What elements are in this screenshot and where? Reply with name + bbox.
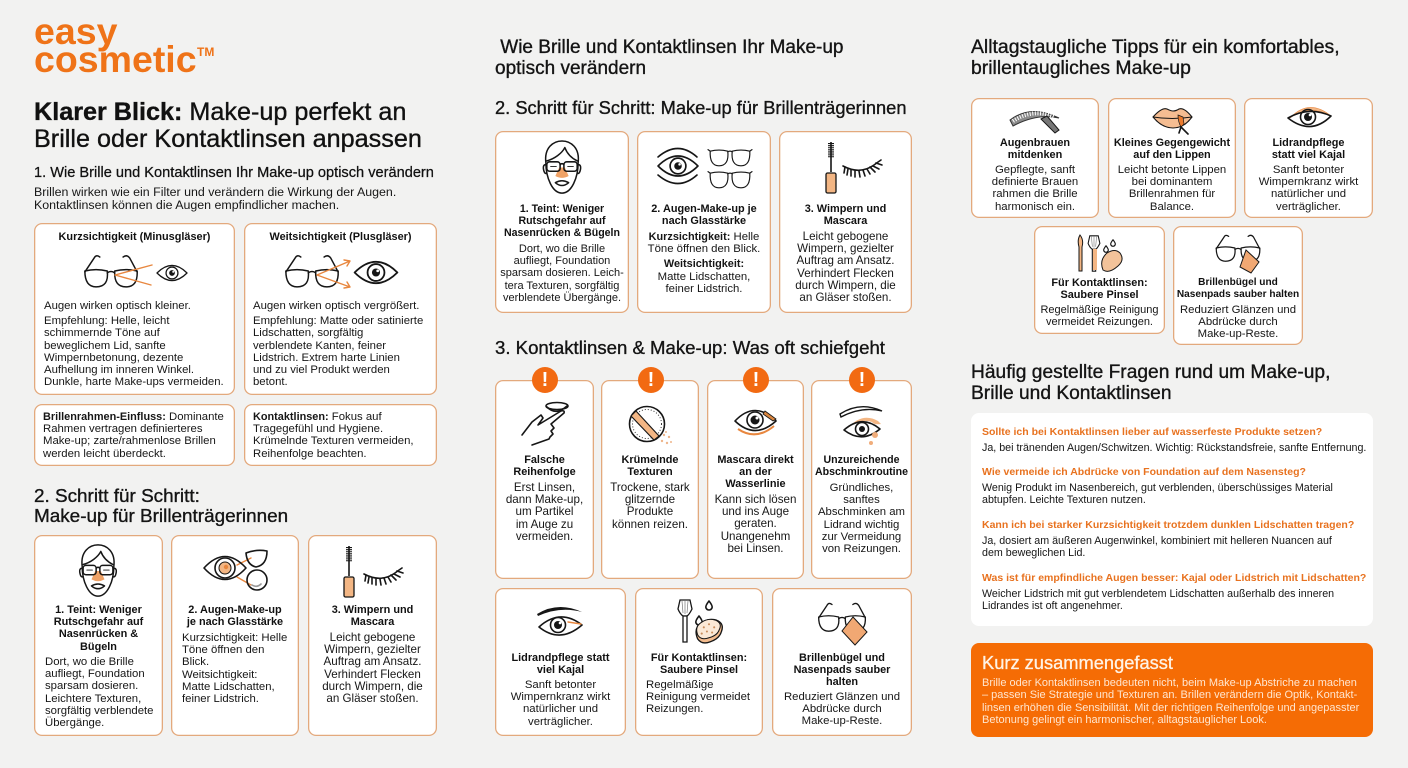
text: Augenbrauen (971, 164, 1099, 213)
heading: Augenbrauen: Augenbrauen (1000, 137, 1070, 149)
text: Brillenrahmen-Einfluss: werden leicht überdeckt. (43, 448, 166, 460)
text: Teint: tera Texturen, sorgfältig (505, 280, 619, 292)
heading: column 2 title (495, 37, 844, 79)
text: Krümelnde Texturen: glitzernde (625, 493, 675, 506)
heading: section 3: 3. Kontaktlinsen & Make-up: Was oft schiefgeht (495, 337, 885, 358)
text: Saubere Pinsel: Reizungen. (646, 703, 703, 715)
text: Brillenrahmen-Einfluss: Rahmen vertragen definierteres (43, 423, 203, 435)
panel: FAQ (971, 413, 1373, 626)
text: Kurzsichtigkeit body: schimmernde Töne auf (44, 327, 160, 339)
heading: Falsche Reihenfolge: Reihenfolge (513, 466, 576, 478)
heading: Kurzsichtigkeit: Kurzsichtigkeit (Minusgläser) (59, 231, 210, 243)
text: Weitsichtigkeit body (253, 300, 423, 388)
panel: Wimpern left (308, 535, 437, 736)
heading: FAQ (971, 363, 1330, 404)
text: Saubere Pinsel: vermeidet Reizungen. (1046, 316, 1153, 328)
FAQ question 4: Was ist für empfindliche Augen besser: Kajal oder Lidstrich mit Lidschatten? (982, 572, 1366, 584)
text: Weitsichtigkeit body: und zu viel Produkt werden (253, 364, 390, 376)
text: Augenbrauen: harmonisch ein. (995, 201, 1075, 213)
text: Augen-Make-up: Matte Lidschatten, (658, 271, 750, 283)
heading: Krümelnde Texturen: Texturen (627, 466, 673, 478)
heading: Augen-Make-up (186, 604, 283, 628)
heading: column 3 title (971, 37, 1340, 79)
text: Brillenbügel (1173, 304, 1303, 341)
icon: brush, drops and sponge (677, 598, 727, 644)
FAQ answer 2 (982, 482, 1333, 506)
intro text (34, 185, 396, 212)
text: Saubere Pinsel: Regelmäßige Reinigung (1040, 304, 1158, 316)
text: summary (982, 677, 1359, 726)
heading: Brillenbügel (1173, 277, 1303, 301)
panel: Saubere Pinsel middle (635, 588, 763, 736)
heading: Lidrandpflege: statt viel Kajal (1272, 149, 1345, 161)
heading: Abschminkroutine: Abschminkroutine (815, 466, 908, 478)
text: Lidrandpflege (495, 679, 626, 728)
text: Wimpern: Auftrag am Ansatz. (797, 254, 894, 267)
heading: Brillenbügel: Nasenpads sauber (794, 664, 890, 676)
heading: Lidrandpflege (1244, 137, 1373, 161)
heading: Mascara Wasserlinie: an der (739, 466, 772, 478)
text: Kurzsichtigkeit body (44, 300, 224, 388)
icon: powder compact (628, 406, 672, 444)
text: Falsche Reihenfolge: Erst Linsen, (514, 481, 575, 494)
panel: Krümelnde Texturen (601, 380, 699, 579)
text: Brillenrahmen-Einfluss: Brillenrahmen-Einfluss: Dominante (43, 411, 224, 423)
logo: easycosmetic: TM (197, 45, 214, 59)
FAQ answer 3: dem beweglichen Lid. (982, 547, 1085, 559)
heading: Augenbrauen (971, 137, 1099, 161)
text: Teint: sorgfältig verblendete (45, 705, 153, 717)
text: Lidrandpflege: verträglicher. (1276, 201, 1341, 213)
text: Mascara Wasserlinie: Unangenehm (721, 530, 790, 543)
heading: Brillenbügel: Brillenbügel und (799, 652, 885, 664)
text: Wimpern: durch Wimpern, die (795, 279, 896, 292)
text: Weitsichtigkeit body: Lidschatten, sorgfältig (253, 327, 363, 339)
text: Lidrandpflege: natürlicher und (1271, 188, 1346, 200)
heading: Lippen: Kleines Gegengewicht (1114, 137, 1230, 149)
text: Augen-Make-up (648, 231, 760, 295)
heading: Teint: 1. Teint: Weniger (55, 604, 142, 616)
panel: Saubere Pinsel right (1034, 226, 1165, 334)
text: Teint: aufliegt, Foundation (514, 255, 610, 267)
heading: column 3 title: Alltagstaugliche Tipps für ein komfortables, (971, 36, 1340, 58)
text: Teint: sparsam dosieren. (45, 680, 138, 692)
text: Augenbrauen: rahmen die Brille (992, 188, 1078, 200)
text: Kontaktlinsen: Kontaktlinsen: Fokus auf (253, 411, 382, 423)
text: Weitsichtigkeit body: Augen wirken optisch vergrößert. Empfehlung: Matte oder satinierte (253, 300, 423, 327)
text: Teint: Dort, wo die Brille (45, 656, 134, 668)
icon: warning badge (532, 367, 558, 393)
text: Abschminkroutine: sanftes (843, 494, 880, 506)
heading: Lippen (1108, 137, 1236, 161)
text: Weitsichtigkeit body: verblendete Kanten, feiner (253, 340, 386, 352)
panel: Teint middle (495, 131, 629, 313)
heading: Saubere Pinsel (1034, 277, 1165, 301)
text: Augen-Make-up: Töne öffnen den Blick. Weitsichtigkeit: (648, 243, 760, 270)
icon: glasses with shrinking eye (84, 255, 188, 288)
icon: glasses with enlarging eye (285, 255, 398, 289)
text: Wimpern: an Gläser stoßen. (326, 692, 419, 705)
text: Wimpern: an Gläser stoßen. (799, 291, 892, 304)
icon: eye with shadow (1287, 106, 1333, 130)
heading: Augen-Make-up: je nach Glasstärke (187, 616, 283, 628)
heading: Teint: Rutschgefahr auf (518, 215, 606, 227)
FAQ answer 2: Wenig Produkt im Nasenbereich, gut verblenden, überschüssiges Material (982, 482, 1333, 494)
icon: mascara and lashes (343, 546, 404, 598)
text: Falsche Reihenfolge: um Partikel (516, 505, 574, 518)
panel: Kurzsichtigkeit (34, 223, 235, 395)
text: Falsche Reihenfolge (506, 481, 583, 543)
text: Teint: Leichtere Texturen, (45, 693, 141, 705)
panel: Weitsichtigkeit (244, 223, 437, 395)
text: Kontaktlinsen: Krümelnde Texturen vermeiden, (253, 435, 414, 447)
text: Wimpern: Wimpern, gezielter (324, 643, 421, 656)
text: Lidrandpflege: Sanft betonter (1273, 164, 1344, 176)
icon: eye with mascara on waterline (734, 410, 777, 436)
text: Weitsichtigkeit body: Lidstrich. Extrem harte Linien (253, 352, 400, 364)
panel: Augen-Make-up middle (637, 131, 771, 313)
text: Abschminkroutine (811, 482, 912, 555)
text: Augen-Make-up: Blick. (182, 656, 209, 668)
icon: eye and two glasses (657, 148, 753, 188)
icon: warning badge: ! (859, 369, 865, 391)
text: Krümelnde Texturen: Trockene, stark (610, 481, 690, 494)
text: Lippen: Brillenrahmen für (1129, 188, 1215, 200)
icon: brushes, drops and sponge (1077, 234, 1125, 274)
text: Abschminkroutine: Gründliches, (830, 482, 893, 494)
FAQ answer 1: Ja, bei tränenden Augen/Schwitzen. Wichtig: Rückstandsfreie, sanfte Entfernung. (982, 442, 1366, 454)
heading: section 2 middle: 2. Schritt für Schritt: Make-up für Brillenträgerinnen (495, 97, 906, 118)
heading: summary: Kurz zusammengefasst (982, 652, 1173, 673)
heading: Lidrandpflege: Lidrandpflege (1272, 137, 1344, 149)
heading: Teint: Nasenrücken & (59, 628, 138, 640)
text: summary: – passen Sie Strategie und Texturen an. Brillen verändern die Optik, Kontakt- (982, 689, 1357, 701)
FAQ answer 4 (982, 588, 1334, 612)
icon: glasses and cloth (1213, 234, 1265, 276)
heading: Brillenbügel: Brillenbügel und (1198, 277, 1278, 288)
heading: Wimpern (332, 604, 413, 628)
panel: Augen-Make-up left (171, 535, 299, 736)
text: Wimpern: Auftrag am Ansatz. (324, 655, 421, 668)
text: Augen-Make-up: Kurzsichtigkeit: Helle (182, 632, 287, 644)
icon: eye with brow (536, 604, 584, 640)
heading: section 2 left: 2. Schritt für Schritt: (34, 486, 200, 507)
text: Lidrandpflege: Wimpernkranz wirkt (511, 691, 610, 703)
heading: Lippen: auf den Lippen (1133, 149, 1211, 161)
text: Brillenbügel: Reduziert Glänzen und (784, 691, 900, 703)
heading: Teint (54, 604, 144, 653)
heading: Mascara Wasserlinie (717, 454, 794, 490)
heading: Augen-Make-up: 2. Augen-Make-up je (651, 203, 757, 215)
text: Teint (500, 243, 624, 304)
text: Mascara Wasserlinie (715, 493, 796, 555)
text: Augen-Make-up: Töne öffnen den (182, 644, 264, 656)
heading: Teint: 1. Teint: Weniger (520, 203, 604, 215)
heading: Saubere Pinsel: Für Kontaktlinsen: (651, 652, 747, 664)
heading: FAQ: Häufig gestellte Fragen rund um Make-up, (971, 362, 1330, 383)
text: Wimpern: Leicht gebogene (330, 631, 415, 644)
text: Mascara Wasserlinie: Kann sich lösen (715, 493, 796, 506)
heading: Wimpern: 3. Wimpern und (332, 604, 413, 616)
text: Kurzsichtigkeit body: Aufhellung im inneren Winkel. (44, 364, 194, 376)
text: summary: Brille oder Kontaktlinsen bedeuten nicht, beim Make-up Abstriche zu machen (982, 677, 1357, 689)
text: Falsche Reihenfolge: im Auge zu (516, 518, 573, 531)
text: Saubere Pinsel: Reinigung vermeidet (646, 691, 750, 703)
panel: Brillenbügel middle (772, 588, 912, 736)
FAQ answer 4: Weicher Lidstrich mit gut verblendetem Lidschatten außerhalb des inneren (982, 588, 1334, 600)
text: Augen-Make-up: feiner Lidstrich. (182, 693, 259, 705)
heading: Lidrandpflege (495, 652, 626, 676)
heading: section 2 left: Make-up für Brillenträgerinnen (34, 506, 288, 527)
panel: Abschminkroutine (811, 380, 912, 579)
heading: Wimpern: 3. Wimpern und (805, 203, 886, 215)
text: Kontaktlinsen: Reihenfolge beachten. (253, 448, 367, 460)
text: Wimpern (795, 230, 896, 304)
text: Brillenbügel: Reduziert Glänzen und (1180, 304, 1296, 316)
FAQ answer 3 (982, 535, 1332, 559)
logo: easycosmetic: cosmetic (34, 38, 197, 80)
text: Kurzsichtigkeit body: Wimpernbetonung, dezente (44, 352, 183, 364)
text: Brillenbügel (772, 691, 912, 728)
heading: Teint: Nasenrücken & Bügeln (504, 227, 620, 239)
heading: Saubere Pinsel: Saubere Pinsel (1060, 289, 1139, 301)
icon: warning badge: ! (753, 369, 759, 391)
text: Mascara Wasserlinie: bei Linsen. (727, 542, 784, 555)
heading: column 2 title: Wie Brille und Kontaktlinsen Ihr Make-up (500, 37, 844, 58)
heading: Falsche Reihenfolge: Falsche (524, 454, 565, 466)
text: Lippen: Leicht betonte Lippen (1118, 164, 1226, 176)
text: Teint: Dort, wo die Brille (519, 243, 605, 255)
title: Klarer Blick: Make-up perfekt an (34, 98, 406, 126)
icon: eyebrow and brush (1009, 106, 1061, 134)
text: Lidrandpflege: Sanft betonter (525, 679, 596, 691)
heading: Augen-Make-up: 2. Augen-Make-up (188, 604, 282, 616)
text: Teint: aufliegt, Foundation (45, 668, 145, 680)
text: Brillenbügel: Abdrücke durch (802, 703, 882, 715)
text: Lidrandpflege (1244, 164, 1373, 213)
icon: mascara and lashes (825, 142, 883, 194)
heading: Lidrandpflege: Lidrandpflege statt (511, 652, 610, 664)
icon: hand with contact lens (521, 402, 569, 446)
heading: Brillenbügel (772, 652, 912, 689)
text: Abschminkroutine: zur Vermeidung (822, 531, 901, 543)
text: Teint: sparsam dosieren. Leich- (500, 267, 624, 279)
text: Brillenrahmen-Einfluss: Make-up; zarte/rahmenlose Brillen (43, 435, 216, 447)
text: Brillenbügel: Make-up-Reste. (1198, 328, 1278, 340)
text: Saubere Pinsel (646, 679, 750, 716)
heading: Brillenbügel: Nasenpads sauber halten (1177, 289, 1299, 300)
icon: lips with lip brush (1152, 106, 1194, 134)
text: Teint: verblendete Übergänge. (503, 292, 621, 304)
text: Brillenrahmen-Einfluss (43, 411, 224, 460)
heading: Lidrandpflege: viel Kajal (537, 664, 584, 676)
text: Falsche Reihenfolge: vermeiden. (516, 530, 573, 543)
panel: Lidrandpflege middle (495, 588, 626, 736)
panel: Falsche Reihenfolge (495, 380, 594, 579)
panel: Kurz zusammengefasst (971, 643, 1373, 737)
heading: Saubere Pinsel: Für Kontaktlinsen: (1051, 277, 1148, 289)
title: Brille oder Kontaktlinsen anpassen (34, 125, 422, 153)
panel: Wimpern middle (779, 131, 912, 313)
heading: Wimpern (805, 203, 886, 227)
logo: easycosmetic (34, 10, 214, 80)
text: Augen-Make-up (182, 632, 287, 705)
icon: glasses and cloth (817, 602, 869, 644)
heading: Mascara Wasserlinie: Mascara direkt (717, 454, 794, 466)
heading: column 2 title: optisch verändern (495, 58, 646, 79)
heading: Augen-Make-up (651, 203, 757, 227)
FAQ question 3: Kann ich bei starker Kurzsichtigkeit trotzdem dunklen Lidschatten tragen? (982, 519, 1354, 531)
heading: Augenbrauen: mitdenken (1008, 149, 1062, 161)
heading: Abschminkroutine: Unzureichende (824, 454, 899, 466)
panel: Brillenbügel right (1173, 226, 1303, 345)
intro text: Kontaktlinsen können die Augen empfindlicher machen. (34, 198, 339, 212)
FAQ answer 3: Ja, dosiert am äußeren Augenwinkel, kombiniert mit helleren Nuancen auf (982, 535, 1332, 547)
text: Lidrandpflege: Wimpernkranz wirkt (1259, 176, 1358, 188)
text: Mascara Wasserlinie: und ins Auge (722, 505, 789, 518)
panel: Lidrandpflege right (1244, 98, 1373, 218)
text: Abschminkroutine: Lidrand wichtig (824, 519, 899, 531)
text: summary: linsen erhöhen die Sensibilität. Mit der richtigen Reihenfolge und angepasster (982, 702, 1359, 714)
text: Lidrandpflege: natürlicher und (523, 703, 598, 715)
text: Krümelnde Texturen: können reizen. (612, 518, 688, 531)
text: Augenbrauen: Gepflegte, sanft (995, 164, 1075, 176)
text: Augen-Make-up: Kurzsichtigkeit: Helle (649, 231, 759, 243)
text: Augen-Make-up: Weitsichtigkeit: (182, 669, 257, 681)
heading: Falsche Reihenfolge (513, 454, 576, 478)
heading: Wimpern: Mascara (824, 215, 867, 227)
heading: Augen-Make-up: nach Glasstärke (662, 215, 746, 227)
text: Teint (45, 656, 153, 729)
panel: Kontaktlinsen (244, 404, 437, 466)
icon: warning badge: ! (542, 369, 548, 391)
FAQ answer 4: Lidrandes ist oft angenehmer. (982, 600, 1123, 612)
panel: Brillenrahmen-Einfluss (34, 404, 235, 466)
icon: warning badge (638, 367, 664, 393)
icon: face with glasses (78, 544, 117, 597)
text: Krümelnde Texturen: Produkte (627, 505, 673, 518)
heading: column 3 title: brillentaugliches Make-up (971, 57, 1191, 79)
icon: eye with brow and smudges (839, 406, 882, 445)
text: Brillenbügel: Abdrücke durch (1198, 316, 1278, 328)
heading: Teint: Rutschgefahr auf (54, 616, 143, 628)
title (34, 98, 422, 153)
icon: face with glasses (542, 140, 582, 194)
text: Wimpern: durch Wimpern, die (322, 680, 423, 693)
text: Wimpern: Leicht gebogene (803, 230, 888, 243)
heading: FAQ: Brille und Kontaktlinsen (971, 382, 1172, 404)
text: Lippen (1108, 164, 1236, 213)
FAQ answer 2: abtupfen. Leichte Texturen nutzen. (982, 494, 1146, 506)
heading: Brillenbügel: halten (826, 676, 858, 688)
text: Mascara Wasserlinie: geraten. (734, 517, 777, 530)
text: Krümelnde Texturen (610, 481, 690, 531)
text: Augenbrauen: definierte Brauen (992, 176, 1078, 188)
text: Saubere Pinsel: Regelmäßige (646, 679, 713, 691)
heading: section 1: 1. Wie Brille und Kontaktlinsen Ihr Make-up optisch verändern (34, 165, 434, 181)
text: Brillenbügel: Make-up-Reste. (802, 715, 882, 727)
text: Kurzsichtigkeit body: Augen wirken optisch kleiner. Empfehlung: Helle, leicht (44, 300, 191, 327)
heading: Mascara Wasserlinie: Wasserlinie (725, 478, 786, 490)
text: Weitsichtigkeit body: betont. (253, 376, 288, 388)
panel: Lippen (1108, 98, 1236, 218)
FAQ question 1: Sollte ich bei Kontaktlinsen lieber auf wasserfeste Produkte setzen? (982, 426, 1322, 438)
icon: eye with lenses (203, 550, 268, 591)
heading: Krümelnde Texturen: Krümelnde (622, 454, 678, 466)
text: Augen-Make-up: feiner Lidstrich. (666, 283, 742, 295)
heading: Wimpern: Mascara (351, 616, 394, 628)
FAQ question 2: Wie vermeide ich Abdrücke von Foundation auf dem Nasensteg? (982, 466, 1306, 478)
text: Wimpern: Wimpern, gezielter (797, 242, 894, 255)
panel: Mascara Wasserlinie (707, 380, 804, 579)
text: Lippen: Balance. (1150, 201, 1194, 213)
text: Augen-Make-up: Matte Lidschatten, (182, 681, 275, 693)
text: Lippen: bei dominantem (1132, 176, 1212, 188)
text: summary: Betonung gelingt ein harmonischer, alltagstauglicher Look. (982, 714, 1267, 726)
text: Wimpern (322, 631, 423, 705)
icon: warning badge (743, 367, 769, 393)
icon: warning badge: ! (648, 369, 654, 391)
heading: section 2 left (34, 486, 288, 527)
text: Kontaktlinsen: Tragegefühl und Hygiene. (253, 423, 383, 435)
panel: Teint left (34, 535, 163, 736)
text: Kurzsichtigkeit body: Dunkle, harte Make-ups vermeiden. (44, 376, 224, 388)
heading: Weitsichtigkeit: Weitsichtigkeit (Plusgläser) (269, 231, 412, 243)
text: Abschminkroutine: von Reizungen. (822, 543, 901, 555)
intro text: Brillen wirken wie ein Filter und verändern die Wirkung der Augen. (34, 185, 396, 199)
text: Abschminkroutine: Abschminken am (818, 506, 905, 518)
text: Wimpern: Verhindert Flecken (324, 668, 421, 681)
icon: warning badge (849, 367, 875, 393)
text: Falsche Reihenfolge: dann Make-up, (506, 493, 583, 506)
text: Kurzsichtigkeit body: beweglichem Lid, sanfte (44, 340, 166, 352)
heading: Abschminkroutine (815, 454, 908, 478)
text: Wimpern: Verhindert Flecken (797, 267, 894, 280)
heading: Krümelnde Texturen (622, 454, 678, 478)
heading: Teint: Bügeln (80, 641, 117, 653)
text: Kontaktlinsen (253, 411, 414, 460)
text: Saubere Pinsel (1034, 304, 1165, 328)
heading: Saubere Pinsel: Saubere Pinsel (660, 664, 738, 676)
heading: Saubere Pinsel (635, 652, 763, 676)
logo: easycosmetic: easy (34, 10, 117, 52)
heading: Teint (504, 203, 620, 239)
text: Lidrandpflege: verträglicher. (528, 716, 593, 728)
text: Teint: Übergänge. (45, 717, 104, 729)
panel: Augenbrauen (971, 98, 1099, 218)
